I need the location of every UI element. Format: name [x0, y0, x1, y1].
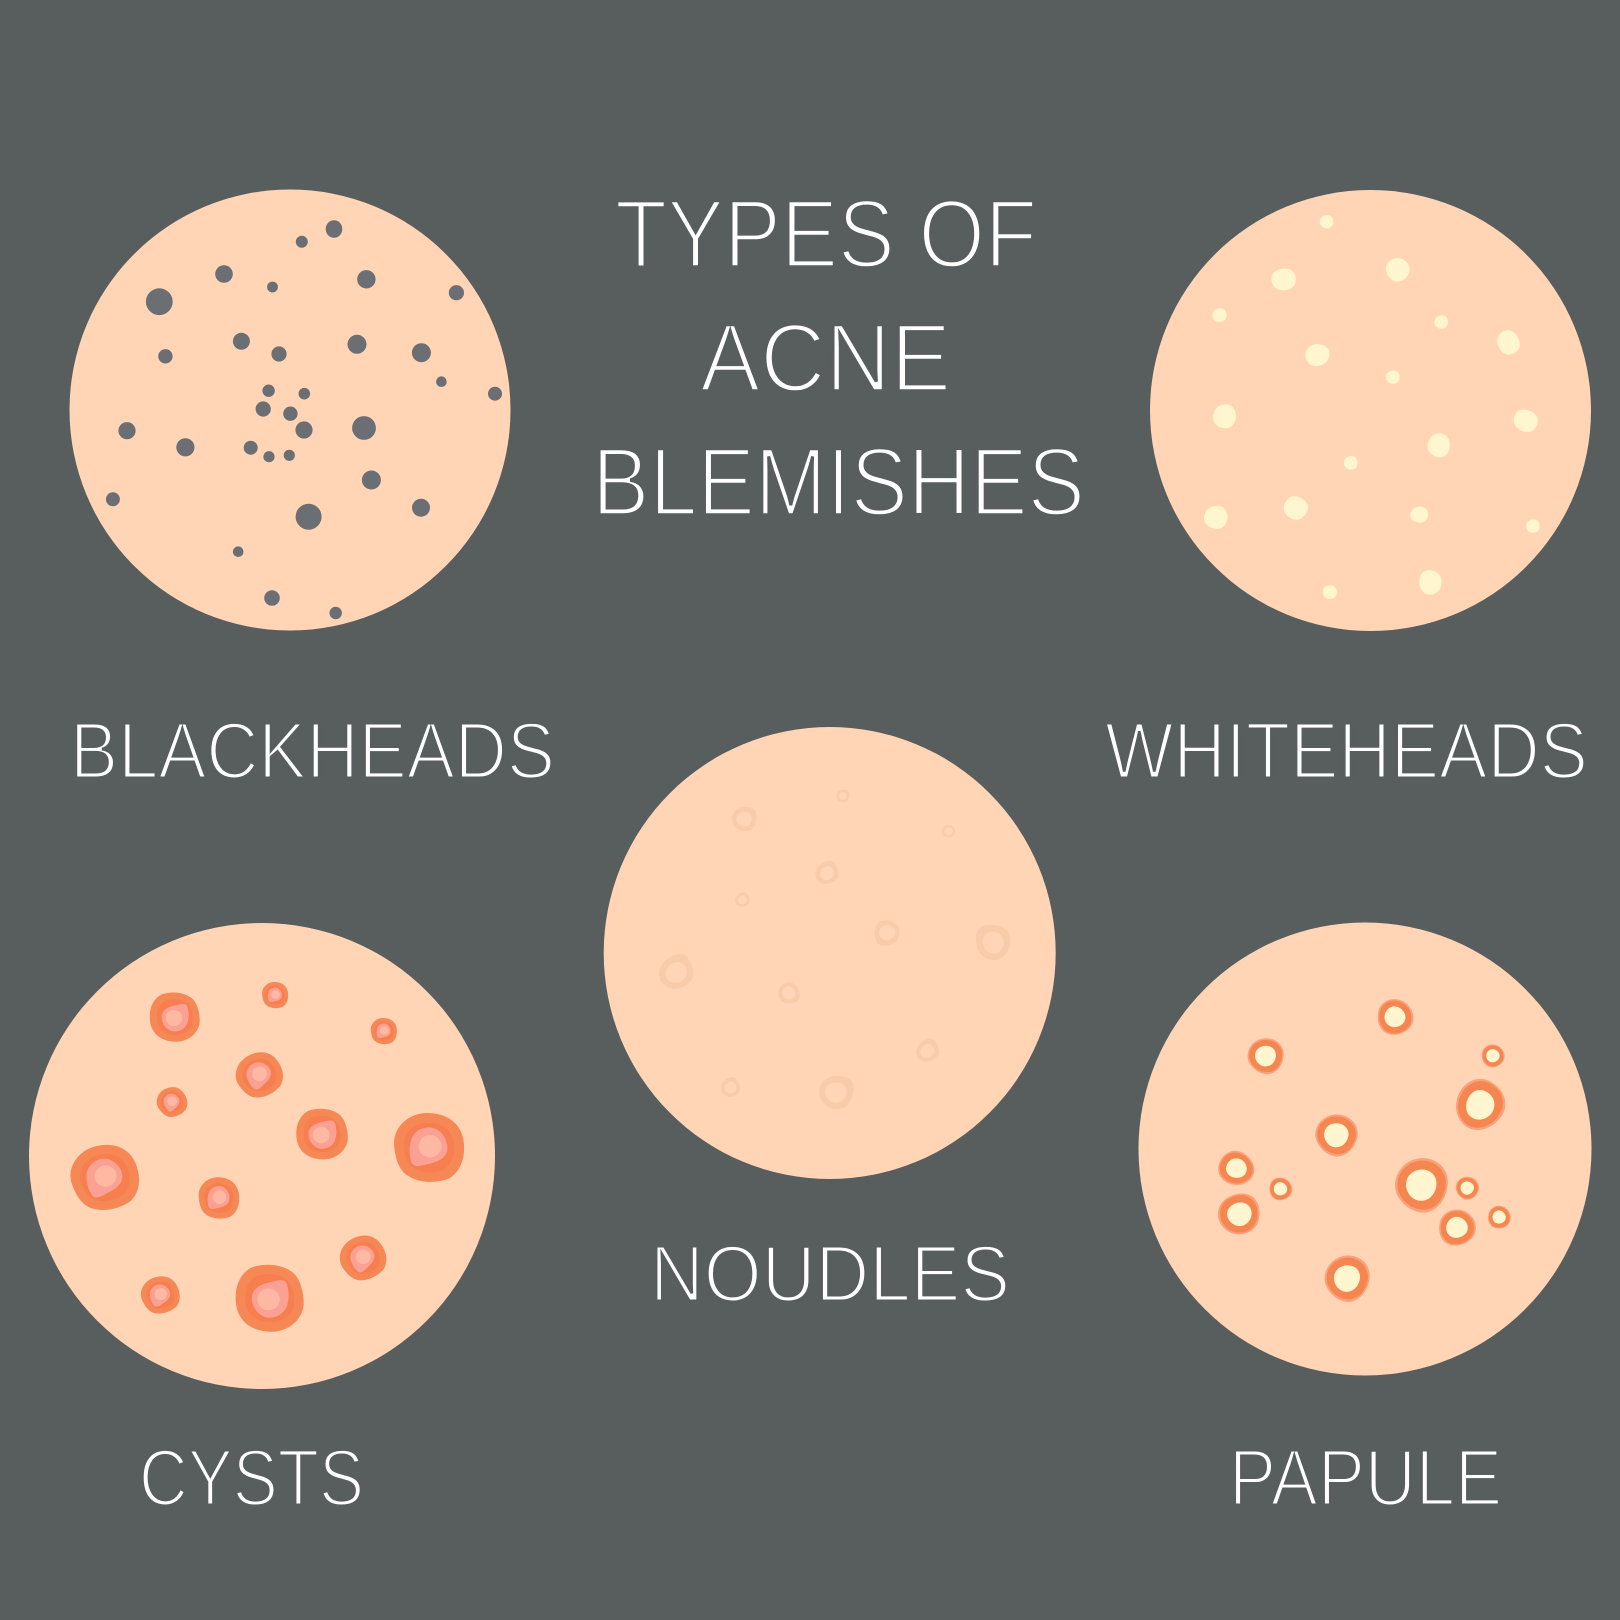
label: blackheads: BLACKHEADS [70, 706, 555, 795]
label: cysts: CYSTS [139, 1433, 364, 1522]
papule lesions [1211, 992, 1514, 1306]
title: BLEMISHES [592, 429, 1085, 536]
panel: cysts [29, 923, 495, 1389]
blackhead dots [106, 220, 502, 619]
title: ACNE [700, 305, 951, 412]
label: papule: PAPULE [1229, 1433, 1502, 1522]
skin disc: cysts [29, 923, 495, 1389]
whitehead spots [1204, 215, 1542, 599]
panel: noudles [604, 727, 1056, 1179]
cyst lesions [64, 982, 464, 1332]
skin disc: noudles [604, 727, 1056, 1179]
label: noudles: NOUDLES [650, 1229, 1010, 1318]
panel: papule [1138, 922, 1592, 1376]
skin disc: blackheads [70, 190, 510, 630]
title: TYPES OF [615, 181, 1037, 288]
skin disc: whiteheads [1150, 190, 1591, 631]
skin disc: papule [1138, 922, 1592, 1376]
panel: whiteheads [1150, 190, 1591, 631]
title [592, 181, 1085, 536]
noudle rings [653, 790, 1010, 1112]
panel: blackheads [70, 190, 510, 630]
